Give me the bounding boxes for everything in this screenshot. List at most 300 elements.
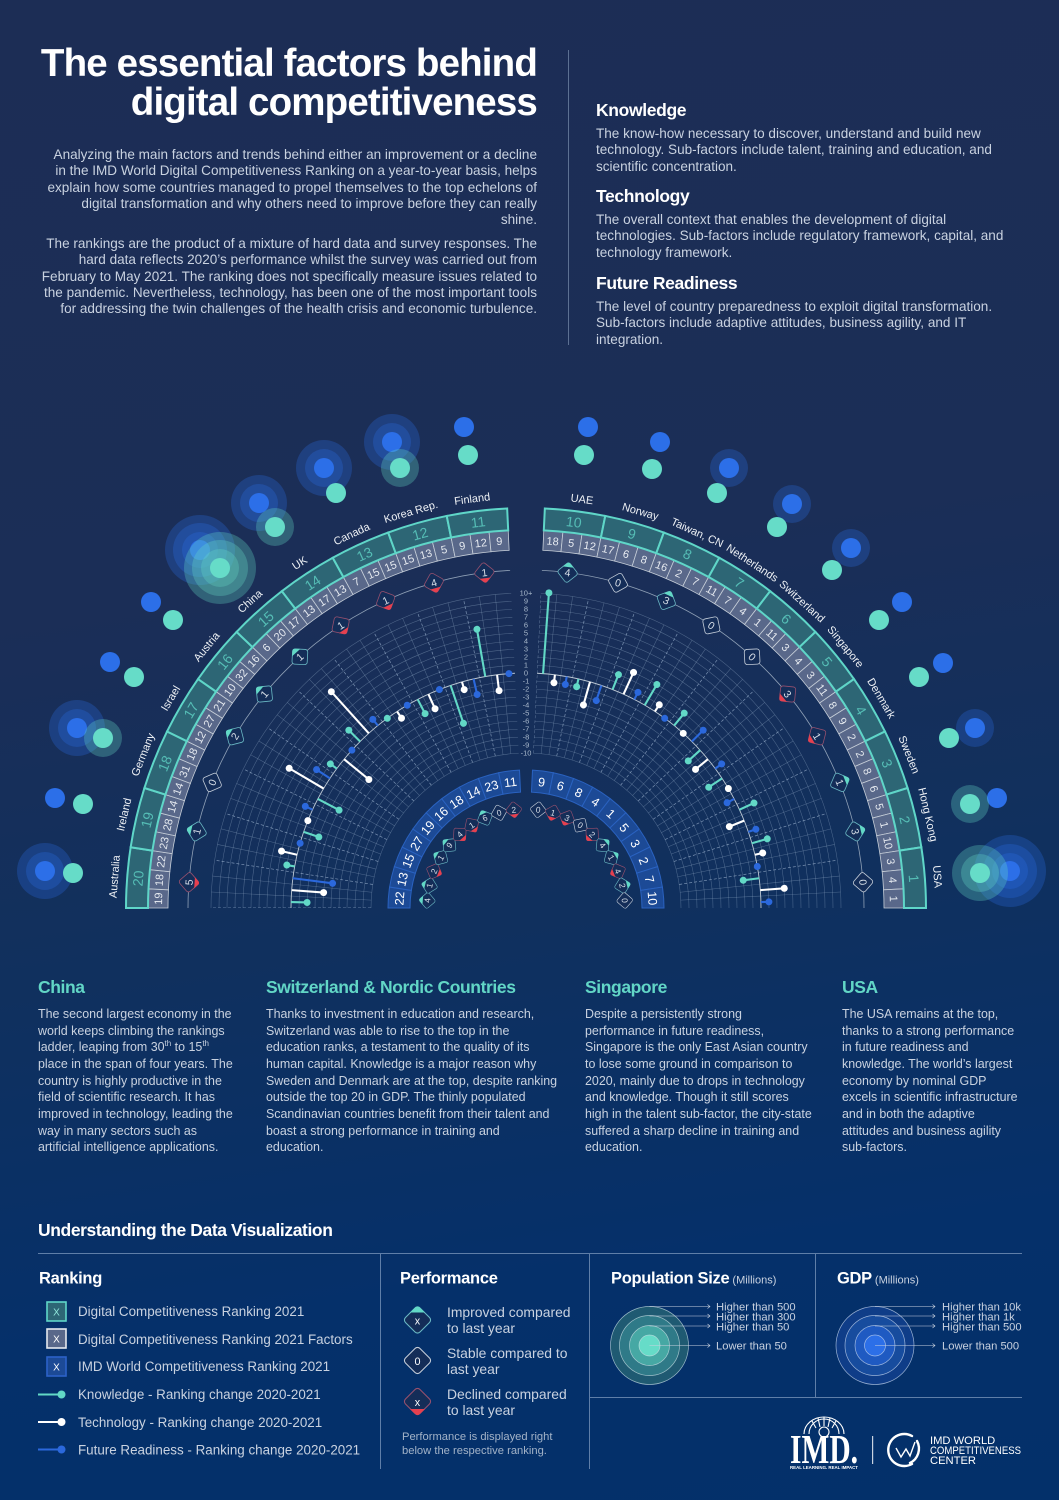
performance diamonds: digital ranking, right: 3 [848, 827, 861, 836]
legend item: digital ranking: X [53, 1308, 60, 1318]
bubble: Denmark [909, 653, 953, 687]
legend panel: performance [400, 1270, 571, 1457]
text: Switzerland & Nordic Countries: outside the top 20 in GDP. The thinly populated [266, 1090, 526, 1104]
inner IMD world competitiveness band [388, 769, 666, 911]
inner IMD ranks: 15 [399, 852, 418, 870]
text: Singapore: suffered a sharp decline in training and [585, 1124, 799, 1138]
axis scale labels: -7 [523, 725, 529, 734]
text: Knowledge [596, 126, 992, 174]
overall digital ranks: 12 [410, 524, 430, 544]
legend item: IMD ranking: IMD World Competitiveness Ranking 2021 [78, 1359, 330, 1374]
overall digital ranks: 20 [130, 870, 147, 887]
factor ranks: right half: 9 [835, 716, 849, 727]
inner IMD ranks: 1 [603, 806, 618, 822]
text: China: field of scientific research. It has [38, 1090, 215, 1104]
population and GDP bubbles [17, 414, 1046, 907]
inner performance diamonds: 3 [563, 812, 572, 824]
factor ranks: right half: 18 [546, 536, 559, 548]
country labels: Netherlands [724, 542, 780, 585]
inner performance diamonds: 6 [481, 812, 489, 823]
legend panel: population size: Higher than 500 [716, 1302, 796, 1314]
bubble: Netherlands [767, 485, 811, 537]
factor ranks: left half: 7 [351, 576, 362, 589]
performance diamonds: digital ranking, right: 1 [810, 731, 823, 742]
axis scale labels: -8 [523, 733, 529, 742]
factor ranks: left half: 17 [286, 615, 303, 632]
legend panel: performance: Performance [400, 1270, 498, 1288]
zero baseline arcs [291, 673, 761, 908]
factor ranks: left half: 14 [166, 799, 181, 814]
factor ranks: right half: 11 [813, 682, 830, 699]
country labels: Canada [332, 521, 373, 548]
logo: IMD [790, 1417, 858, 1472]
country labels: Norway [621, 501, 660, 523]
bubble: UK [231, 475, 294, 546]
axis scale labels: 3 [524, 645, 528, 654]
country labels: Australia [108, 854, 123, 898]
country labels: Hong Kong [915, 787, 939, 843]
intro paragraph 2: February to May 2021. The ranking does not specifically measure issues related to [42, 269, 537, 284]
text: USA: excels in scientific infrastructure [842, 1090, 1018, 1104]
heading: Switzerland & Nordic Countries: Switzerland & Nordic Countries [266, 977, 516, 997]
bubble: Korea Rep. [364, 414, 420, 487]
legend panel: population size: Higher than 50 [716, 1322, 789, 1334]
country labels: China [236, 587, 266, 616]
GDP circles [836, 1306, 914, 1384]
performance diamonds: digital ranking, right: 1 [832, 778, 846, 788]
text: China: way in many sectors such as [38, 1124, 197, 1138]
heading: Future Readiness: Future Readiness [596, 273, 737, 293]
factor ranks: right half: 8 [639, 554, 649, 567]
performance diamonds: digital ranking, right: 0 [856, 879, 869, 886]
text: Knowledge: The know-how necessary to discover, understand and build new [596, 126, 981, 141]
text: Singapore: education. [585, 1140, 642, 1154]
legend panel: population size: Population Size (Millions) [611, 1270, 776, 1288]
text: China: country is highly productive in the [38, 1074, 222, 1088]
factor ranks: left half: 28 [161, 818, 176, 832]
factor ranks: right half: 11 [703, 583, 719, 599]
factor ranks: left half: 22 [155, 855, 169, 868]
logo divider [872, 1436, 873, 1464]
factor ranks: right half: 8 [825, 700, 839, 712]
country labels: Israel [159, 684, 183, 713]
text: USA [842, 1007, 1018, 1154]
overall digital ranks [130, 513, 922, 887]
factor ranks: left half: 13 [419, 547, 434, 562]
bubble: Israel [100, 652, 144, 687]
inner IMD ranks: 23 [483, 778, 500, 795]
overall digital ranks: 8 [681, 545, 695, 563]
legend item: stable [403, 1345, 568, 1377]
overall digital ranks: 7 [732, 574, 747, 592]
performance diamonds: digital ranking, left [177, 561, 496, 894]
axis scale labels: -9 [523, 741, 529, 750]
text: Singapore: high in the talent sub-factor, the city-state [585, 1107, 812, 1121]
text: Switzerland & Nordic Countries [266, 1007, 557, 1154]
lollipops: ranking change, left [277, 625, 513, 906]
axis scale labels: 10+ [520, 589, 533, 598]
title [41, 42, 537, 124]
performance ring lines [188, 570, 864, 908]
performance diamonds: digital ranking, right: 0 [705, 619, 717, 633]
performance diamonds: digital ranking, left: 2 [229, 731, 242, 742]
inner performance diamonds: 1 [467, 820, 477, 831]
factor ranks: right half: 6 [621, 548, 631, 561]
country labels: USA [930, 865, 944, 889]
heading: China: China [38, 977, 85, 997]
overall digital ranks: 18 [155, 753, 175, 774]
text: Singapore: and knowledge. Though it still scores [585, 1090, 789, 1104]
legend item: technology: Technology - Ranking change 2020-2021 [78, 1415, 322, 1430]
factor ranks: left half: 21 [211, 697, 228, 714]
text: Future Readiness: integration. [596, 332, 663, 347]
inner performance diamonds: 4 [612, 867, 624, 876]
factor ranks: left half: 6 [261, 642, 273, 654]
inner IMD ranks: 10 [645, 891, 660, 906]
performance diamonds: digital ranking, left: 0 [206, 778, 220, 788]
bubble: Germany [49, 700, 122, 757]
axis scale labels: -6 [523, 717, 529, 726]
legend title: Understanding the Data Visualization [38, 1220, 332, 1240]
performance note [402, 1431, 553, 1457]
factor ranks: left half: 19 [153, 892, 165, 905]
legend item: improved: x [415, 1315, 421, 1327]
inner IMD ranks: 8 [572, 785, 585, 801]
factor ranks: right half: 4 [886, 877, 898, 884]
legend item: improved [403, 1304, 571, 1336]
bubble: Hong Kong [951, 785, 1007, 823]
text: Singapore: to lose some ground in comparison to [585, 1057, 792, 1071]
text: Switzerland & Nordic Countries: Switzerland was able to rise to the top in the [266, 1024, 509, 1038]
factor ranks: left half: 12 [193, 730, 209, 746]
factor ranks: left half: 9 [496, 536, 503, 548]
overall digital ranks: 9 [626, 525, 638, 543]
factor ranks: right half: 7 [721, 594, 733, 608]
factor ranks: right half: 16 [653, 559, 669, 575]
factor ranks: left half [153, 536, 503, 905]
text: Singapore: performance in future readiness, [585, 1024, 764, 1038]
performance diamonds: digital ranking, left: 4 [430, 577, 439, 590]
inner performance diamonds: 1 [435, 853, 446, 862]
country labels: Taiwan, CN [669, 516, 725, 550]
legend item: declined [403, 1386, 567, 1418]
factor ranks: right half: 6 [867, 784, 880, 794]
axis scale labels: 9 [524, 597, 528, 606]
text: Singapore: 2020, mainly due to drops in technology [585, 1074, 805, 1088]
factor ranks: left half: 14 [171, 781, 186, 797]
inner IMD ranks: 9 [537, 775, 546, 790]
inner IMD ranks: 2 [636, 855, 651, 867]
performance diamonds: digital ranking, right: 4 [564, 567, 571, 580]
factor ranks: left half: 13 [301, 603, 318, 620]
factor ranks: left half: 18 [185, 746, 201, 763]
overall digital ranks: 6 [778, 610, 795, 628]
intro paragraph 2: hard data reflects 2020’s performance whilst the survey was carried out from [79, 252, 537, 267]
text: Knowledge: technology. Sub-factors include talent, training and education, and [596, 142, 992, 157]
factor ranks: right half: 2 [673, 567, 684, 581]
factor ranks: left half: 20 [272, 627, 289, 644]
inner IMD ranks: 6 [555, 779, 566, 794]
legend panel: population size: Lower than 50 [716, 1340, 787, 1352]
overall digital ranks: 16 [214, 650, 236, 673]
factor ranks: left half: 32 [233, 667, 250, 684]
legend item: improved: to last year [447, 1320, 515, 1336]
inner performance diamonds: 2 [511, 804, 517, 815]
bubble: Norway [642, 432, 670, 479]
country labels: UK [290, 554, 310, 573]
overall digital ranks: 1 [906, 874, 922, 883]
legend panel: GDP: Higher than 500 [942, 1322, 1022, 1334]
bubble: Australia [17, 843, 83, 899]
factor ranks: left half: 15 [401, 553, 416, 568]
intro paragraph 1: explain how some countries managed to propel themselves to the top echelons of [48, 180, 537, 195]
factor ranks: right half: 3 [779, 642, 791, 654]
logo: world competitiveness center [888, 1434, 1021, 1467]
axis scale labels: 8 [524, 605, 528, 614]
text: Future Readiness: The level of country preparedness to exploit digital transformation. [596, 299, 992, 314]
text: China: ladder, leaping from 30th to 15th [38, 1039, 209, 1054]
country labels: Switzerland [776, 578, 827, 625]
intro paragraph 1: digital transformation and why others need to improve before they can really [81, 196, 537, 211]
performance diamonds: digital ranking, right [556, 561, 875, 894]
country labels: Ireland [115, 797, 134, 832]
text: USA: and in both the adaptive [842, 1107, 975, 1121]
text: USA: in future readiness and [842, 1040, 969, 1054]
factor ranks: left half: 5 [440, 544, 448, 557]
factor ranks: right half: 12 [583, 540, 597, 554]
text: Switzerland & Nordic Countries: Thanks to investment in education and research, [266, 1007, 534, 1021]
logo: world competitiveness center: CENTER [930, 1455, 976, 1467]
ranking band: right half [543, 508, 931, 914]
legend panel: ranking: Ranking [39, 1270, 102, 1288]
axis scale labels: -4 [523, 701, 529, 710]
factor ranks: left half: 15 [366, 566, 382, 582]
intro paragraph 2: for addressing the twin challenges of the health crisis and economic turbulence. [60, 301, 537, 316]
factor ranks: right half [546, 536, 899, 902]
heading: USA: USA [842, 977, 878, 997]
bubble: Austria [141, 592, 183, 630]
text: USA: thanks to a strong performance [842, 1024, 1014, 1038]
text: USA: The USA remains at the top, [842, 1007, 998, 1021]
text: USA: sub-factors. [842, 1140, 907, 1154]
overall digital ranks: 3 [878, 757, 896, 770]
legend panel: population size: Higher than 300 [716, 1312, 796, 1324]
inner performance diamonds: 0 [620, 898, 630, 904]
text: USA: attitudes and business agility [842, 1124, 1001, 1138]
factor ranks: right half: 11 [763, 627, 780, 644]
intro paragraph 2 [42, 236, 537, 316]
ranking band: left half [126, 504, 515, 908]
country labels: Germany [130, 731, 158, 778]
factor ranks: right half: 8 [860, 767, 873, 777]
legend item: improved: Improved compared [447, 1304, 571, 1320]
legend item: digital ranking: Digital Competitiveness Ranking 2021 [78, 1304, 304, 1319]
bubble: Canada [296, 440, 352, 503]
bubble: Singapore [869, 592, 912, 630]
factor ranks: right half: 2 [853, 749, 866, 760]
overall digital ranks: 11 [470, 513, 487, 531]
factor ranks: right half: 5 [872, 802, 885, 811]
axis scale labels: 1 [524, 661, 528, 670]
inner performance diamonds [418, 800, 634, 910]
overall digital ranks: 10 [565, 513, 583, 531]
text: Future Readiness [596, 299, 992, 347]
factor ranks: right half: 4 [791, 655, 804, 668]
factor ranks: right half: 10 [880, 836, 894, 850]
text: China: place in the span of four years. The [38, 1057, 233, 1071]
heading: Singapore: Singapore [585, 977, 667, 997]
text: China: improved in technology, leading the [38, 1107, 233, 1121]
radial ranking chart [17, 414, 1046, 909]
heading: Technology: Technology [596, 186, 689, 206]
inner IMD ranks: 11 [503, 775, 518, 790]
axis scale labels: 4 [524, 637, 528, 646]
performance diamonds: digital ranking, left: 1 [258, 688, 272, 701]
country labels [108, 491, 944, 898]
legend item: stable: Stable compared to [447, 1345, 568, 1361]
legend panel: GDP: GDP (Millions) [837, 1270, 919, 1288]
legend item: stable: 0 [414, 1356, 421, 1368]
overall digital ranks: 5 [818, 654, 836, 670]
text: Singapore: Despite a persistently strong [585, 1007, 742, 1021]
overall digital ranks: 13 [354, 544, 375, 565]
text: Switzerland & Nordic Countries: education ranks, a testament to the quality of its [266, 1040, 529, 1054]
factor ranks: right half: 7 [690, 576, 701, 589]
logo: IMD: REAL LEARNING. REAL IMPACT [790, 1465, 858, 1470]
axis scale labels: 0 [524, 669, 528, 678]
text: Switzerland & Nordic Countries: education. [266, 1140, 323, 1154]
lollipops: ranking change, right [540, 589, 788, 906]
text: USA: knowledge. The world’s largest [842, 1057, 1012, 1071]
factor ranks: left half: 16 [246, 653, 263, 670]
inner performance diamonds: 1 [549, 807, 557, 818]
bubble: Sweden [939, 709, 994, 748]
factor ranks: right half: 5 [567, 537, 575, 550]
logo: world competitiveness center: COMPETITIVENESS [930, 1445, 1021, 1457]
text: China: artificial intelligence applications. [38, 1140, 218, 1154]
factor ranks: left half: 27 [202, 713, 218, 730]
logo: IMD: IMD. [790, 1426, 858, 1472]
factor ranks: left half: 13 [332, 583, 349, 600]
legend panel: GDP: Lower than 500 [942, 1340, 1019, 1352]
text: Singapore [585, 1007, 812, 1154]
factor ranks: left half: 9 [458, 540, 466, 553]
inner IMD ranks: 3 [627, 837, 643, 850]
inner IMD ranks: 7 [642, 874, 657, 884]
text: Switzerland & Nordic Countries: Scandinavian countries benefit from their talent and [266, 1107, 549, 1121]
legend item: stable: last year [447, 1361, 500, 1377]
legend item: knowledge: Knowledge - Ranking change 2020-2021 [78, 1387, 321, 1402]
performance note: Performance is displayed right [402, 1431, 553, 1443]
axis scale labels: -1 [523, 677, 529, 686]
title: digital competitiveness [131, 81, 537, 124]
legend panel: GDP: Higher than 10k [942, 1302, 1021, 1314]
text: Singapore: Singapore is the only East Asian country [585, 1040, 808, 1054]
text: Technology: technologies. Sub-factors include regulatory framework, capital, and [596, 228, 1003, 243]
header divider [568, 50, 569, 345]
overall digital ranks: 2 [896, 814, 914, 826]
axis scale labels: 5 [524, 629, 528, 638]
factor ranks: right half: 3 [884, 858, 896, 865]
performance diamonds: digital ranking, right: 3 [781, 688, 794, 701]
inner IMD ranks: 18 [447, 793, 466, 812]
legend item: IMD ranking: X [53, 1362, 60, 1374]
performance diamonds: digital ranking, right: 3 [661, 594, 671, 608]
factor ranks: right half: 1 [887, 895, 899, 902]
bubble: China [165, 515, 256, 604]
intro paragraph 1 [48, 147, 538, 227]
inner IMD ranks: 5 [616, 821, 632, 835]
factor ranks: right half: 1 [877, 821, 890, 829]
intro paragraph 2: the pandemic. Nevertheless, technology, has been one of the most important tools [44, 285, 537, 300]
heading: Knowledge: Knowledge [596, 100, 686, 120]
factor ranks: left half: 31 [177, 764, 193, 780]
axis scale labels: 2 [524, 653, 528, 662]
axis scale labels: -10 [521, 749, 531, 758]
logo: world competitiveness center: IMD WORLD [930, 1435, 995, 1447]
country labels: Austria [192, 629, 223, 664]
text: Switzerland & Nordic Countries: human capital. Knowledge is a major reason why [266, 1057, 536, 1071]
factor ranks: left half: 10 [222, 682, 239, 699]
factor ranks: left half: 15 [383, 559, 399, 575]
factor ranks: left half: 12 [474, 537, 488, 550]
performance diamonds: digital ranking, left: 1 [335, 619, 347, 633]
factor ranks: right half: 2 [844, 732, 858, 743]
performance diamonds: digital ranking, left: 1 [481, 567, 488, 580]
text: Knowledge: scientific concentration. [596, 159, 737, 174]
inner performance diamonds: 2 [617, 882, 628, 889]
overall digital ranks: 14 [302, 572, 324, 594]
inner performance diamonds: 0 [535, 804, 541, 815]
bubble: Switzerland [822, 529, 870, 580]
text: Technology: The overall context that enables the development of digital [596, 212, 946, 227]
inner performance diamonds: 2 [587, 829, 598, 840]
axis scale labels: -3 [523, 693, 529, 702]
intro paragraph 1: shine. [501, 212, 537, 227]
axis scale labels: -5 [523, 709, 529, 718]
factor ranks: right half: 4 [737, 605, 749, 618]
performance diamonds: digital ranking, left: 1 [191, 827, 204, 836]
text: Technology [596, 212, 1003, 260]
bubble: UAE [574, 417, 598, 465]
inner IMD ranks: 4 [589, 794, 602, 810]
overall digital ranks: 4 [852, 703, 870, 718]
inner IMD ranks: 13 [394, 871, 411, 888]
inner performance diamonds: 4 [455, 829, 465, 840]
factor ranks: left half: 18 [154, 874, 167, 887]
legend item: declined: Declined compared [447, 1386, 567, 1402]
axis scale labels: 6 [524, 621, 528, 630]
performance diamonds: digital ranking, right: 0 [613, 577, 622, 590]
inner IMD ranks: 14 [464, 784, 483, 802]
text: China [38, 1007, 233, 1154]
bubble: USA [952, 835, 1046, 907]
factor ranks: right half: 1 [751, 617, 764, 630]
overall digital ranks: 19 [138, 810, 157, 829]
bubble: Ireland [45, 788, 93, 814]
performance diamonds: digital ranking, right: 0 [745, 651, 758, 664]
country labels: Denmark [864, 676, 898, 721]
text: Switzerland & Nordic Countries: boast a strong performance in training and [266, 1124, 500, 1138]
country labels: Korea Rep. [383, 499, 439, 526]
performance note: below the respective ranking. [402, 1445, 547, 1457]
inner performance diamonds: 1 [606, 853, 617, 862]
legend item: declined: x [415, 1397, 421, 1409]
country labels: UAE [570, 492, 594, 507]
legend item: declined: to last year [447, 1402, 515, 1418]
factor ranks: left half: 23 [158, 836, 172, 850]
text: Switzerland & Nordic Countries: Sweden and Denmark are at the top, despite ranking [266, 1074, 557, 1088]
